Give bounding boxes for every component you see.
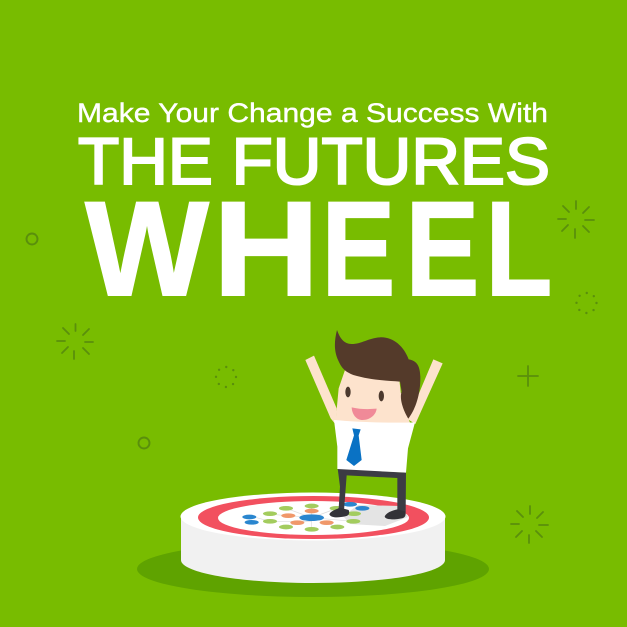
- mouth: [352, 407, 377, 420]
- title line: wheel: L: [485, 173, 552, 324]
- icon: ring left: [26, 234, 38, 244]
- icon: dotted circle left: [216, 367, 236, 387]
- title: [77, 98, 552, 324]
- icon: ring lower: [138, 438, 150, 448]
- title line: the futures: THE FUTURES: [78, 124, 550, 198]
- icon: burst top right: [558, 201, 594, 238]
- left shoe: [329, 508, 349, 517]
- platform top: [180, 492, 446, 540]
- foot shadow: [343, 505, 408, 526]
- tie: [346, 428, 362, 466]
- platform: [180, 492, 446, 583]
- icon: dotted circle right: [576, 293, 596, 313]
- right shoe: [385, 509, 406, 519]
- icon: burst bottom right: [511, 506, 548, 543]
- right arm: [408, 359, 443, 424]
- inner white disc: [218, 501, 409, 535]
- mini futures wheel diagram: [242, 502, 369, 532]
- red ring: [198, 496, 429, 539]
- trousers: [338, 468, 406, 513]
- left eye: [345, 387, 351, 397]
- ear: [399, 392, 408, 402]
- title line: subtitle: Make Your Change a Success With: [77, 98, 548, 128]
- shirt: [334, 420, 415, 473]
- title line: wheel: H: [213, 173, 320, 324]
- title line: wheel: E: [405, 173, 479, 324]
- title line: wheel: E: [321, 173, 395, 324]
- icon: burst left: [57, 324, 93, 359]
- character: [305, 330, 443, 519]
- icon: plus: [518, 366, 538, 386]
- hair: [335, 330, 420, 419]
- platform shadow: [137, 541, 489, 597]
- right eye: [379, 391, 384, 401]
- platform side: [181, 517, 445, 583]
- face: [335, 370, 412, 427]
- title line: wheel: W: [85, 173, 210, 324]
- decorative icons: [26, 201, 596, 543]
- left arm: [305, 356, 337, 425]
